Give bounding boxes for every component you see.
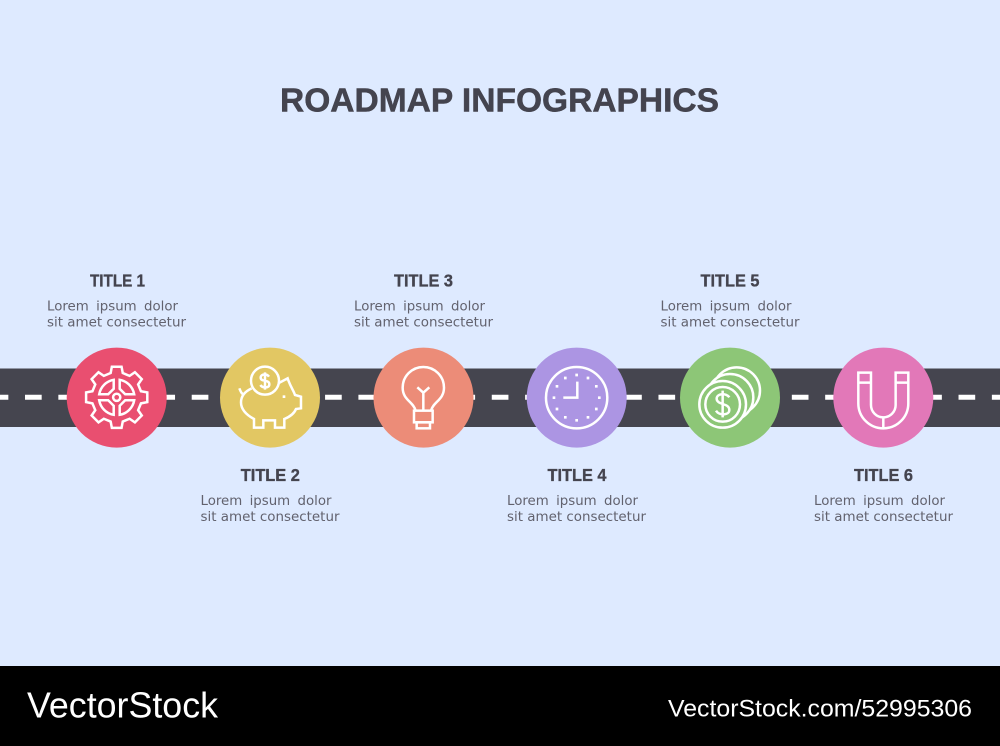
marker: salmon circle — [374, 348, 474, 448]
text block: step 4 description: sit amet consectetur — [507, 510, 647, 525]
text block: step 2 description: Lorem ipsum dolor — [200, 494, 332, 509]
icon: coins — [699, 367, 760, 428]
text block: step 1 description: sit amet consectetur — [47, 316, 187, 331]
text block: step 5 description — [660, 300, 800, 331]
panel: step 2 — [200, 348, 340, 525]
marker: green circle — [680, 348, 780, 448]
panel: step 4 — [507, 348, 647, 525]
heading: title 2: TITLE 2 — [241, 465, 300, 485]
heading: title 5: TITLE 5 — [700, 270, 760, 290]
icon: piggy bank — [239, 367, 301, 428]
text block: step 3 description: Lorem ipsum dolor — [354, 300, 486, 315]
text block: step 3 description — [354, 300, 494, 331]
icon: gear — [86, 367, 147, 428]
text block: step 3 description: sit amet consectetur — [354, 316, 494, 331]
text block: step 4 description — [507, 494, 647, 525]
heading: title 1: TITLE 1 — [90, 270, 145, 290]
icon: clock — [546, 367, 607, 428]
footer bar — [0, 666, 1000, 746]
title: ROADMAP INFOGRAPHICS — [280, 83, 719, 120]
text block: step 6 description: sit amet consectetur — [814, 510, 954, 525]
text block: step 2 description — [200, 494, 340, 525]
panel: step 5 — [660, 270, 800, 448]
heading: title 4: TITLE 4 — [548, 465, 607, 485]
text block: step 6 description: Lorem ipsum dolor — [814, 494, 946, 509]
marker: purple circle — [527, 348, 627, 448]
text block: step 6 description — [814, 494, 954, 525]
marker: yellow circle — [220, 348, 320, 448]
heading: title 3: TITLE 3 — [394, 270, 453, 290]
icon: light bulb — [403, 367, 444, 428]
text block: step 1 description — [47, 300, 187, 331]
icon: magnet — [858, 373, 908, 428]
footer logo text: VectorStock — [27, 684, 219, 726]
text block: step 4 description: Lorem ipsum dolor — [507, 494, 639, 509]
marker: pink circle — [833, 348, 933, 448]
marker: red circle — [67, 348, 167, 448]
text block: step 1 description: Lorem ipsum dolor — [47, 300, 179, 315]
road with dashed centre line — [0, 368, 1000, 427]
panel: step 3 — [354, 270, 494, 448]
text block: step 5 description: sit amet consectetur — [660, 316, 800, 331]
panel: step 1 — [47, 270, 187, 448]
heading: title 6: TITLE 6 — [854, 465, 913, 485]
text block: step 5 description: Lorem ipsum dolor — [660, 300, 792, 315]
footer image id text: VectorStock.com/52995306 — [668, 696, 972, 722]
panel: step 6 — [814, 348, 954, 525]
text block: step 2 description: sit amet consectetur — [200, 510, 340, 525]
